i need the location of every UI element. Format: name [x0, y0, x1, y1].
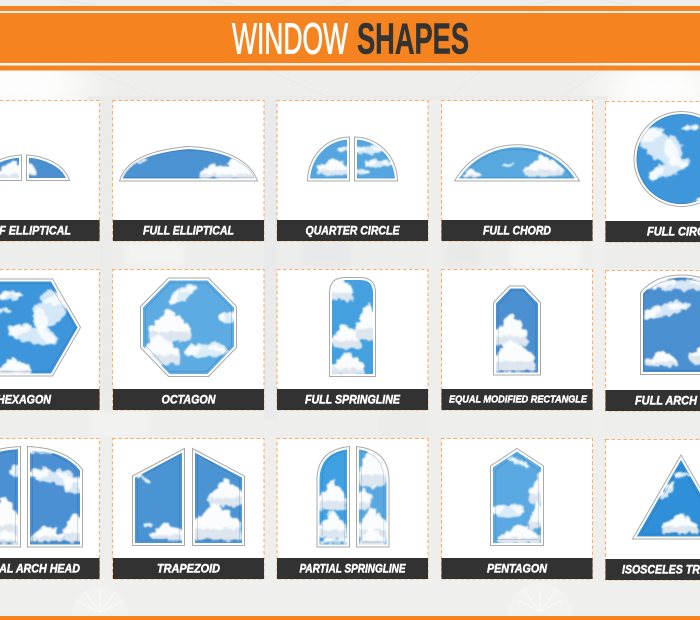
card: equal modified rectangle [442, 270, 592, 410]
icon: hexagon window [0, 278, 81, 376]
card: quarter circle [277, 100, 428, 241]
card: pentagon [442, 438, 592, 579]
label: quarter circle: QUARTER CIRCLE [306, 226, 400, 238]
footer orange bar [0, 616, 700, 620]
card: hexagon [0, 270, 100, 410]
icon: pentagon window [490, 448, 544, 546]
icon: full springline window [329, 277, 376, 377]
card: full springline [277, 270, 428, 410]
card: full chord [442, 100, 592, 241]
card: half elliptical [0, 100, 100, 241]
card: trapezoid [112, 438, 264, 579]
icon: full circle window [634, 111, 700, 207]
title: window shapes: WINDOW [232, 14, 348, 63]
card: full elliptical [112, 100, 264, 241]
icon: partial springline windows [315, 444, 391, 549]
card: isosceles triangle [606, 440, 700, 580]
label: equal modified rectangle: EQUAL MODIFIED RECTANGLE [449, 394, 587, 406]
icon: trapezoid windows [130, 446, 247, 548]
label: partial springline: PARTIAL SPRINGLINE [300, 564, 406, 576]
card: equal arch head [0, 438, 100, 579]
icon: equal modified rectangle window [493, 286, 541, 376]
label: full elliptical: FULL ELLIPTICAL [143, 226, 234, 238]
header banner [0, 6, 700, 70]
icon: full arch head window [638, 272, 700, 377]
label: octagon: OCTAGON [162, 394, 216, 406]
icon: full chord window [454, 144, 580, 182]
icon: quarter circle windows [307, 136, 398, 182]
icon: full elliptical window [118, 146, 258, 182]
label: full chord: FULL CHORD [483, 226, 551, 238]
label: trapezoid: TRAPEZOID [157, 564, 220, 576]
icon: equal arch head windows [0, 444, 89, 549]
card: full arch head [606, 270, 700, 411]
label: pentagon: PENTAGON [487, 564, 548, 576]
card: octagon [112, 270, 264, 410]
icon: isosceles triangle window [630, 452, 700, 542]
card: full circle [606, 102, 700, 242]
icon: octagon window [138, 275, 240, 379]
title: window shapes: SHAPES [357, 14, 469, 63]
card: partial springline [277, 438, 428, 579]
label: full springline: FULL SPRINGLINE [305, 394, 400, 406]
icon: half elliptical window [0, 154, 70, 181]
